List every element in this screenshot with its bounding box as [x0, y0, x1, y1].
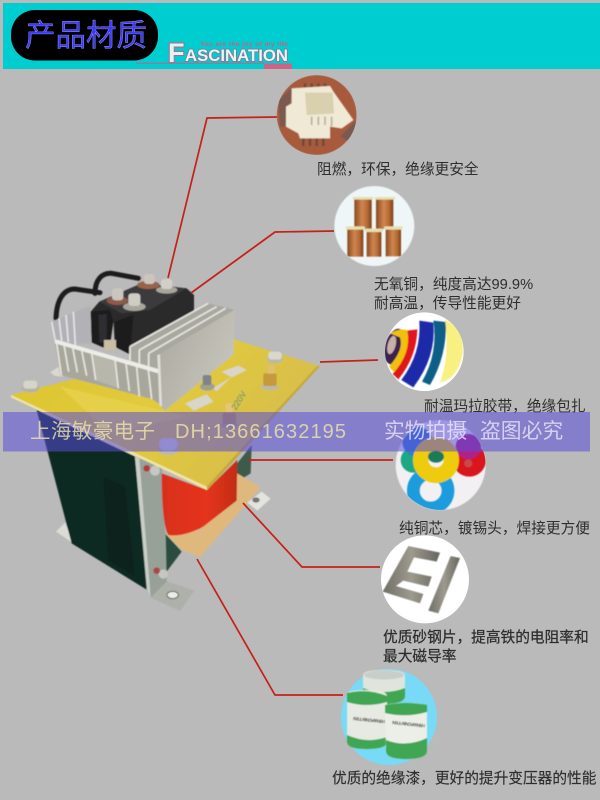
caption: varnish: 优质的绝缘漆，更好的提升变压器的性能	[332, 770, 597, 787]
caption: tape: 耐温玛拉胶带，绝缘包扎	[424, 398, 586, 415]
line to wires	[248, 459, 393, 461]
black power modules	[91, 283, 194, 354]
right can: INSULATING VARNISH	[392, 720, 426, 729]
red coil	[162, 460, 237, 535]
rear core	[233, 445, 252, 482]
leader lines	[168, 117, 393, 695]
icon: copper wire spools	[334, 186, 414, 266]
yellow insulation board	[11, 339, 320, 490]
transformer photo	[11, 273, 320, 611]
section title pill: 产品材质	[25, 19, 147, 53]
header banner	[3, 3, 600, 69]
laminated core	[37, 410, 148, 591]
watermark band: 盗图必究	[480, 420, 563, 443]
section title pill	[11, 10, 158, 60]
rear foot	[56, 523, 73, 543]
large side plate	[158, 309, 235, 411]
line to silicon steel	[243, 503, 380, 567]
icon: silicon steel sheets	[381, 535, 469, 623]
icon: coloured tinned wires	[396, 420, 486, 510]
caption: silicon steel: 优质砂钢片，提高铁的电阻率和	[383, 629, 589, 646]
watermark band: DH;13661632195	[175, 421, 346, 443]
terminal bolts: 220V	[229, 389, 249, 412]
horizontal bar	[54, 339, 158, 373]
mounting screw	[200, 375, 215, 391]
caption: silicon steel: 最大磁导率	[383, 648, 456, 665]
top can	[363, 670, 405, 704]
front heat sink body	[54, 303, 235, 411]
line to varnish	[197, 559, 343, 695]
heat sink base tabs	[50, 366, 247, 411]
tan lower plate	[166, 473, 261, 557]
right foot	[247, 492, 271, 511]
watermark band	[3, 412, 590, 452]
caption: wires: 纯铜芯，镀锡头，焊接更方便	[399, 520, 590, 537]
caption: bobbin: 阻燃，环保，绝缘更安全	[317, 160, 479, 178]
lower fins	[55, 343, 161, 405]
watermark band: 上海敏豪电子	[30, 420, 155, 443]
brand logo: Fascination: You are the joy of my life	[200, 41, 288, 48]
power module cables	[56, 273, 138, 318]
caption: copper wire	[374, 276, 533, 312]
upper right fins	[130, 303, 235, 369]
steel bracket	[135, 457, 194, 611]
brand logo: Fascination: F	[168, 38, 184, 68]
aluminium heat sink	[50, 306, 247, 411]
watermark band: 实物拍摄	[384, 420, 467, 443]
rear left fins	[52, 306, 92, 345]
icon: flame-retardant bobbin	[277, 75, 357, 155]
lower rear core	[163, 533, 182, 572]
brand logo: Fascination: ASCINATION	[185, 46, 288, 65]
caption: silicon steel	[383, 629, 589, 665]
terminal bolts	[22, 352, 283, 455]
line to tape	[320, 360, 378, 362]
line to bobbin	[168, 117, 277, 278]
caption: copper wire: 耐高温，传导性能更好	[374, 295, 521, 312]
module terminals	[104, 274, 177, 350]
brand logo: Fascination	[136, 38, 292, 69]
caption: copper wire: 无氧铜，纯度高达99.9%	[374, 276, 533, 293]
line to copper wire	[191, 231, 334, 293]
left can: INSULATING VARNISH	[353, 716, 386, 724]
icon: insulating varnish cans	[341, 669, 437, 765]
icon: mylar tape rolls	[381, 312, 464, 391]
